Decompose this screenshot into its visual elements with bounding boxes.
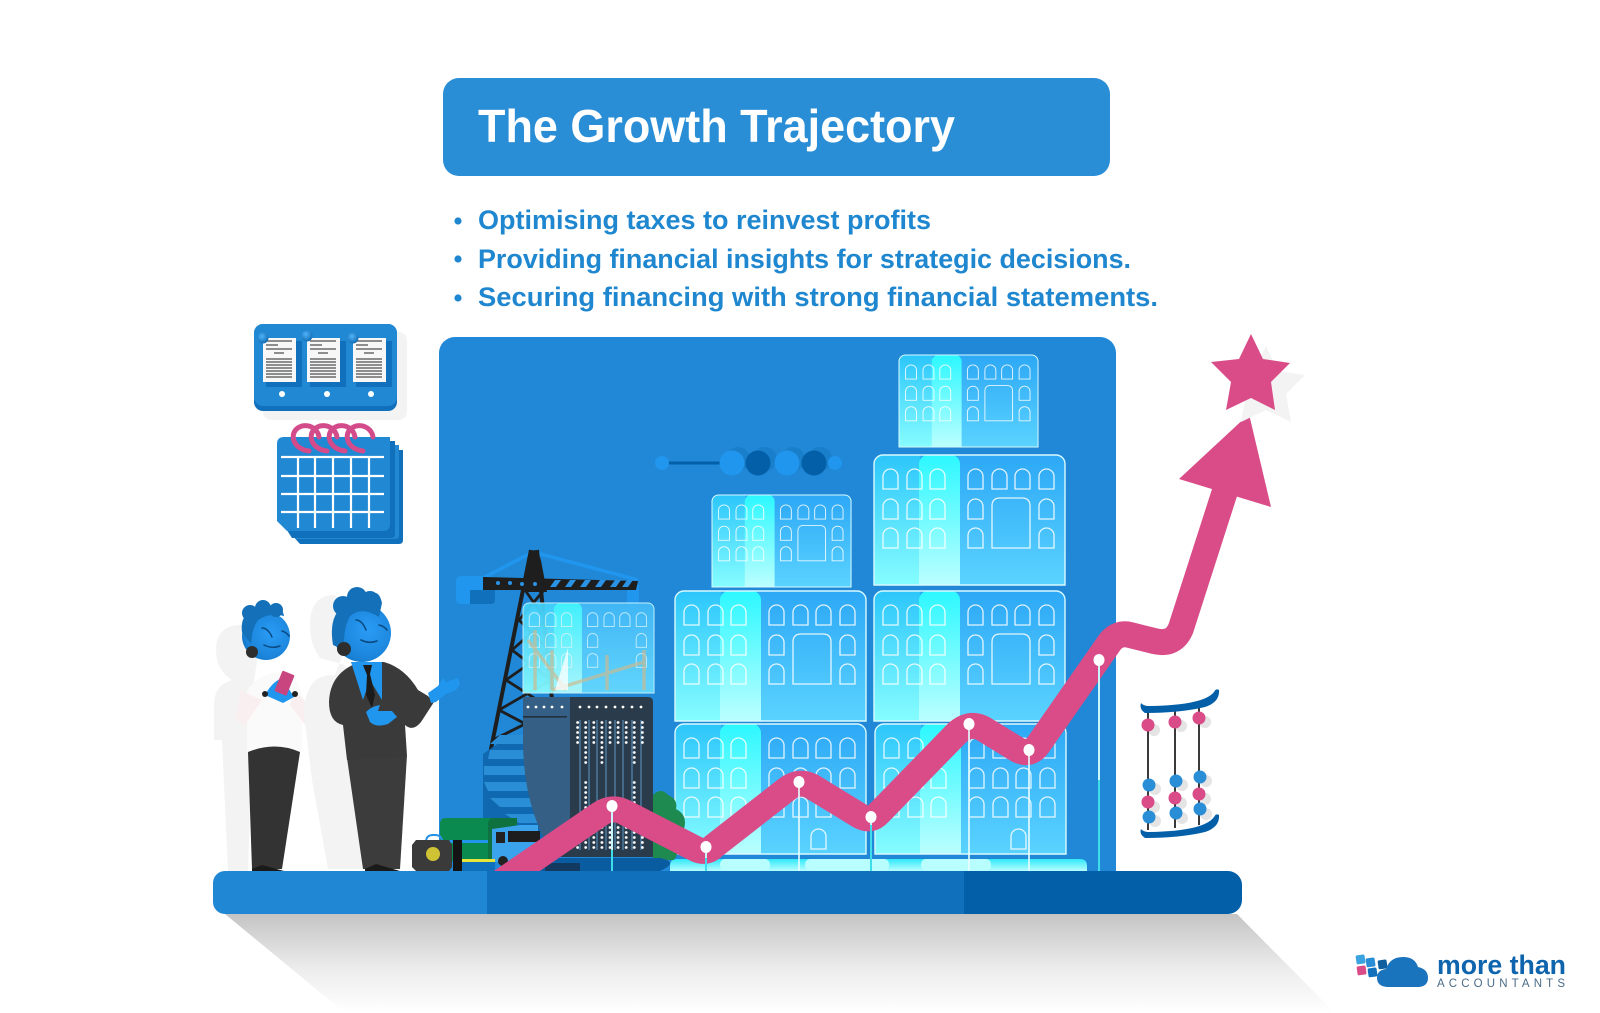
spiral staircase — [483, 735, 560, 860]
bullet list: Securing financing with strong financial statements. — [478, 282, 1158, 312]
building: bottom left — [675, 724, 866, 854]
logo: More Than Accountants: more than — [1437, 950, 1566, 980]
jacket — [329, 662, 434, 760]
bullet list: Providing financial insights for strategic decisions. — [478, 244, 1131, 274]
icon: abacus — [1140, 689, 1219, 838]
hands — [366, 678, 460, 726]
platform — [213, 871, 1242, 914]
trousers — [248, 746, 300, 869]
dark tower — [523, 697, 653, 857]
hands with phone — [262, 671, 298, 703]
title banner: The Growth Trajectory — [478, 100, 955, 152]
growth line markers — [606, 654, 1104, 871]
construction crane — [456, 550, 639, 754]
panel: main blue backdrop — [439, 337, 1116, 877]
title banner — [443, 78, 1110, 176]
logo cloud — [1377, 957, 1428, 987]
logo: More Than Accountants: ACCOUNTANTS — [1437, 978, 1565, 990]
floor shadow — [225, 914, 1335, 1013]
building: small left — [712, 495, 851, 587]
icon: briefcase — [412, 835, 462, 871]
building: top right — [899, 355, 1038, 447]
building: third left — [675, 591, 866, 721]
figure shadow — [304, 595, 362, 869]
head — [332, 587, 391, 662]
building: bottom right — [875, 724, 1066, 854]
icon: star — [1211, 334, 1305, 422]
trousers — [347, 755, 407, 869]
figure shadow — [214, 625, 261, 871]
tree — [653, 791, 685, 860]
collar and tie — [351, 662, 382, 708]
person: right figure — [304, 587, 460, 871]
decorative dot line — [655, 447, 842, 476]
foundation row — [670, 859, 1087, 871]
growth line — [492, 414, 1271, 888]
building: glass under construction — [523, 603, 654, 693]
infographic canvas — [213, 78, 1564, 994]
truck and green container — [440, 818, 670, 871]
arrow head — [1179, 414, 1271, 507]
head — [242, 600, 290, 660]
logo tiles — [1355, 954, 1388, 978]
stacked buildings — [670, 355, 1087, 871]
bullet list — [454, 205, 1158, 312]
icon: calendar — [277, 426, 403, 544]
person: left figure — [214, 600, 320, 871]
icon: document board — [254, 324, 407, 420]
building: second right — [874, 455, 1065, 585]
building: third right — [874, 591, 1065, 721]
bullet list: Optimising taxes to reinvest profits — [478, 205, 931, 235]
shirt — [247, 672, 302, 752]
logo: More Than Accountants — [1355, 950, 1566, 990]
